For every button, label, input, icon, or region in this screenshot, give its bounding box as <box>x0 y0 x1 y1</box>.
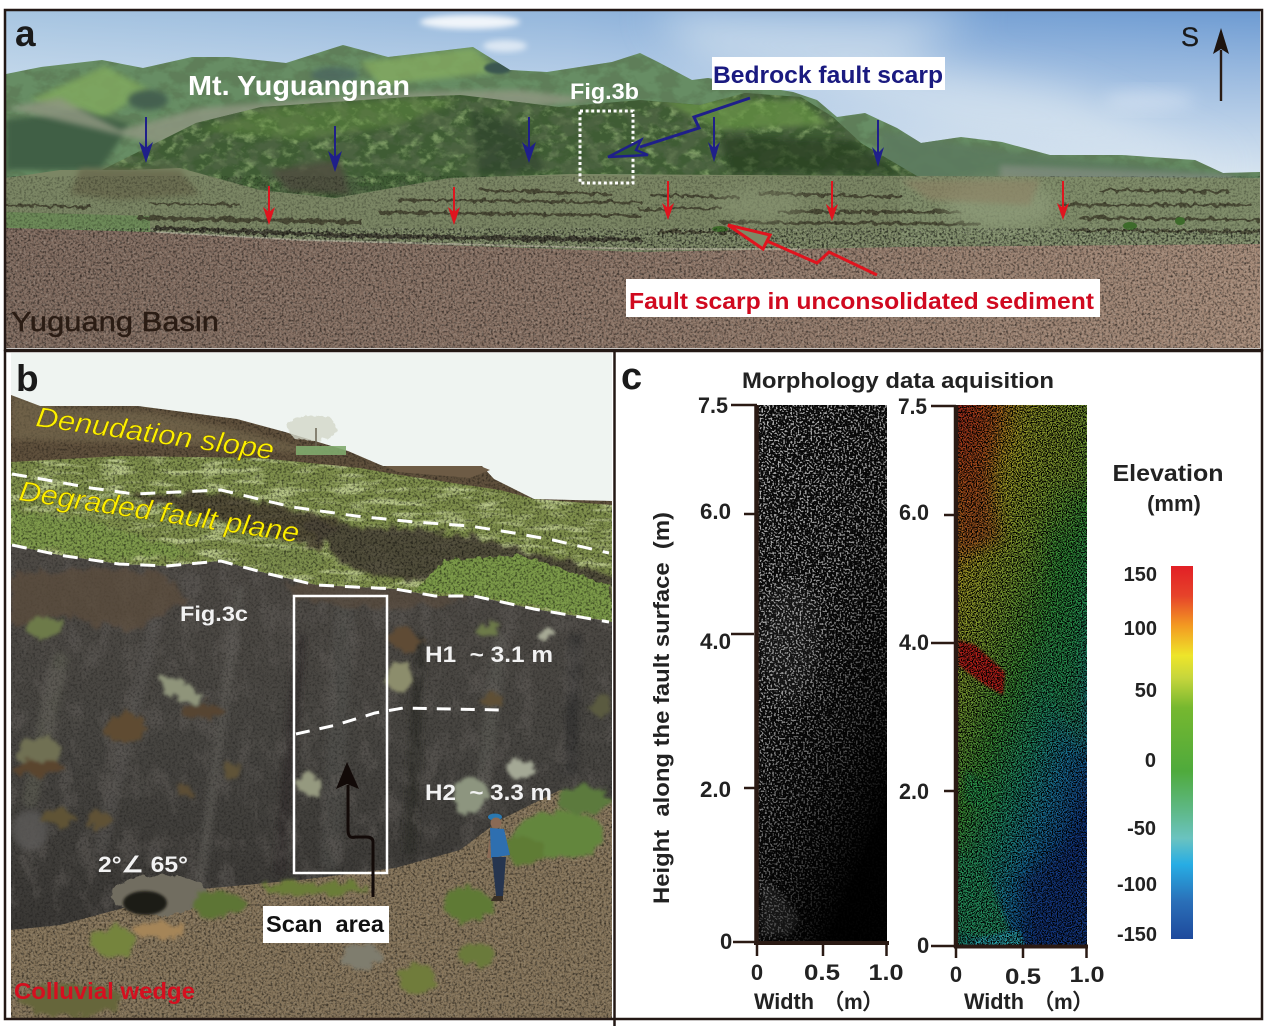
callout: Fault scarp in unconsolidated sediment: Fault scarp in unconsolidated sediment <box>629 288 1094 314</box>
terraces <box>6 168 1260 262</box>
left chart axes: Width <box>754 989 814 1014</box>
scan area rectangle <box>294 596 387 873</box>
color bar labels: -150 <box>1117 924 1157 946</box>
panel letter b: b <box>16 358 39 399</box>
legend title: (mm) <box>1147 491 1201 516</box>
left chart axes: 0.5 <box>804 960 840 985</box>
legend title: Elevation <box>1112 460 1224 486</box>
panel c: morphology data <box>621 356 1224 1014</box>
label: Denudation slope: Denudation slope <box>34 401 276 465</box>
ground <box>6 228 1260 348</box>
title: Morphology data aquisition <box>742 368 1054 393</box>
front hill <box>100 92 930 200</box>
ground and colluvial wedge <box>11 785 612 1018</box>
callout: Bedrock fault scarp: Bedrock fault scarp <box>713 62 943 89</box>
right chart axes: Width <box>964 989 1024 1014</box>
label: Fig.3b: Fig.3b <box>570 79 639 104</box>
right chart axes: 0 <box>917 933 929 958</box>
label: Yuguang Basin: Yuguang Basin <box>11 306 219 337</box>
left chart axes <box>698 393 904 1014</box>
color bar labels: 100 <box>1124 618 1157 640</box>
label: Mt. Yuguangnan: Mt. Yuguangnan <box>188 70 410 101</box>
red arrows: sediment scarp <box>263 181 1069 225</box>
chart: colored elevation map <box>956 405 1087 946</box>
label: H1: H1 ~ 3.1 m <box>425 642 553 667</box>
y axis title: Height along the fault surface (m) <box>649 512 674 904</box>
panel letter a: a <box>15 13 36 54</box>
right chart axes: 1.0 <box>1070 962 1104 987</box>
label: Fig.3c: Fig.3c <box>180 603 248 626</box>
left chart axes: （m） <box>823 990 884 1014</box>
Fig.3b dotted box <box>580 111 633 183</box>
panel letter c: c <box>621 356 642 398</box>
left chart axes: 1.0 <box>868 960 904 985</box>
left chart axes: 0 <box>751 960 763 985</box>
ground shrubs <box>20 786 611 1016</box>
label: H2: H2 ~ 3.3 m <box>425 780 552 805</box>
label: Colluvial wedge: Colluvial wedge <box>14 978 195 1004</box>
color bar labels <box>1117 564 1157 946</box>
north arrow S <box>1181 22 1229 101</box>
left chart axes: 4.0 <box>700 629 731 654</box>
label: dip attitude: 2°∠ 65° <box>98 852 188 877</box>
sky <box>11 353 612 513</box>
sky <box>6 11 1260 186</box>
color bar labels: -50 <box>1127 818 1156 840</box>
dashed event boundary H1/H2 <box>296 708 500 734</box>
label: Scan area: Scan area <box>266 911 384 937</box>
chart: intensity point cloud <box>757 405 887 942</box>
right chart axes: 4.0 <box>899 630 929 655</box>
panel a: panorama of Mt. Yuguangnan and Yuguang Basin <box>6 11 1260 348</box>
scan arrow <box>336 762 373 897</box>
legend title <box>1112 460 1224 516</box>
left chart axes: 0 <box>720 929 732 954</box>
far ridge <box>6 45 1260 200</box>
left chart axes: 7.5 <box>698 393 728 418</box>
right chart axes: 6.0 <box>899 500 929 525</box>
callout: Fault scarp in unconsolidated sediment <box>626 225 1100 317</box>
right chart axes: 7.5 <box>898 394 927 419</box>
color bar labels: 50 <box>1135 680 1157 702</box>
color bar labels: -100 <box>1117 874 1157 896</box>
right chart axes: 2.0 <box>899 779 929 804</box>
rock fault plane <box>11 545 612 930</box>
color bar labels: 150 <box>1124 564 1157 586</box>
color bar <box>1171 566 1193 939</box>
right chart axes: 0.5 <box>1005 964 1041 989</box>
upper dashed line <box>12 474 609 553</box>
panel b: field photo of fault plane <box>11 353 612 1018</box>
denudation slope <box>11 395 612 505</box>
left chart axes: 2.0 <box>700 777 731 802</box>
left chart axes: 6.0 <box>700 499 731 524</box>
label: Scan area <box>263 906 389 943</box>
person <box>487 814 510 901</box>
right chart axes: （m） <box>1033 990 1094 1014</box>
right chart axes: 0 <box>950 962 962 987</box>
blue arrows: bedrock scarp <box>139 117 884 172</box>
label: Degraded fault plane: Degraded fault plane <box>17 475 302 548</box>
color bar labels: 0 <box>1145 750 1156 772</box>
north arrow S: S <box>1181 22 1199 52</box>
shrubs on the rock <box>16 617 611 828</box>
right chart axes <box>898 394 1104 1014</box>
elevation legend <box>1112 460 1224 946</box>
callout: Bedrock fault scarp <box>608 57 945 157</box>
vegetated band <box>11 455 612 625</box>
lower dashed line <box>12 545 609 622</box>
